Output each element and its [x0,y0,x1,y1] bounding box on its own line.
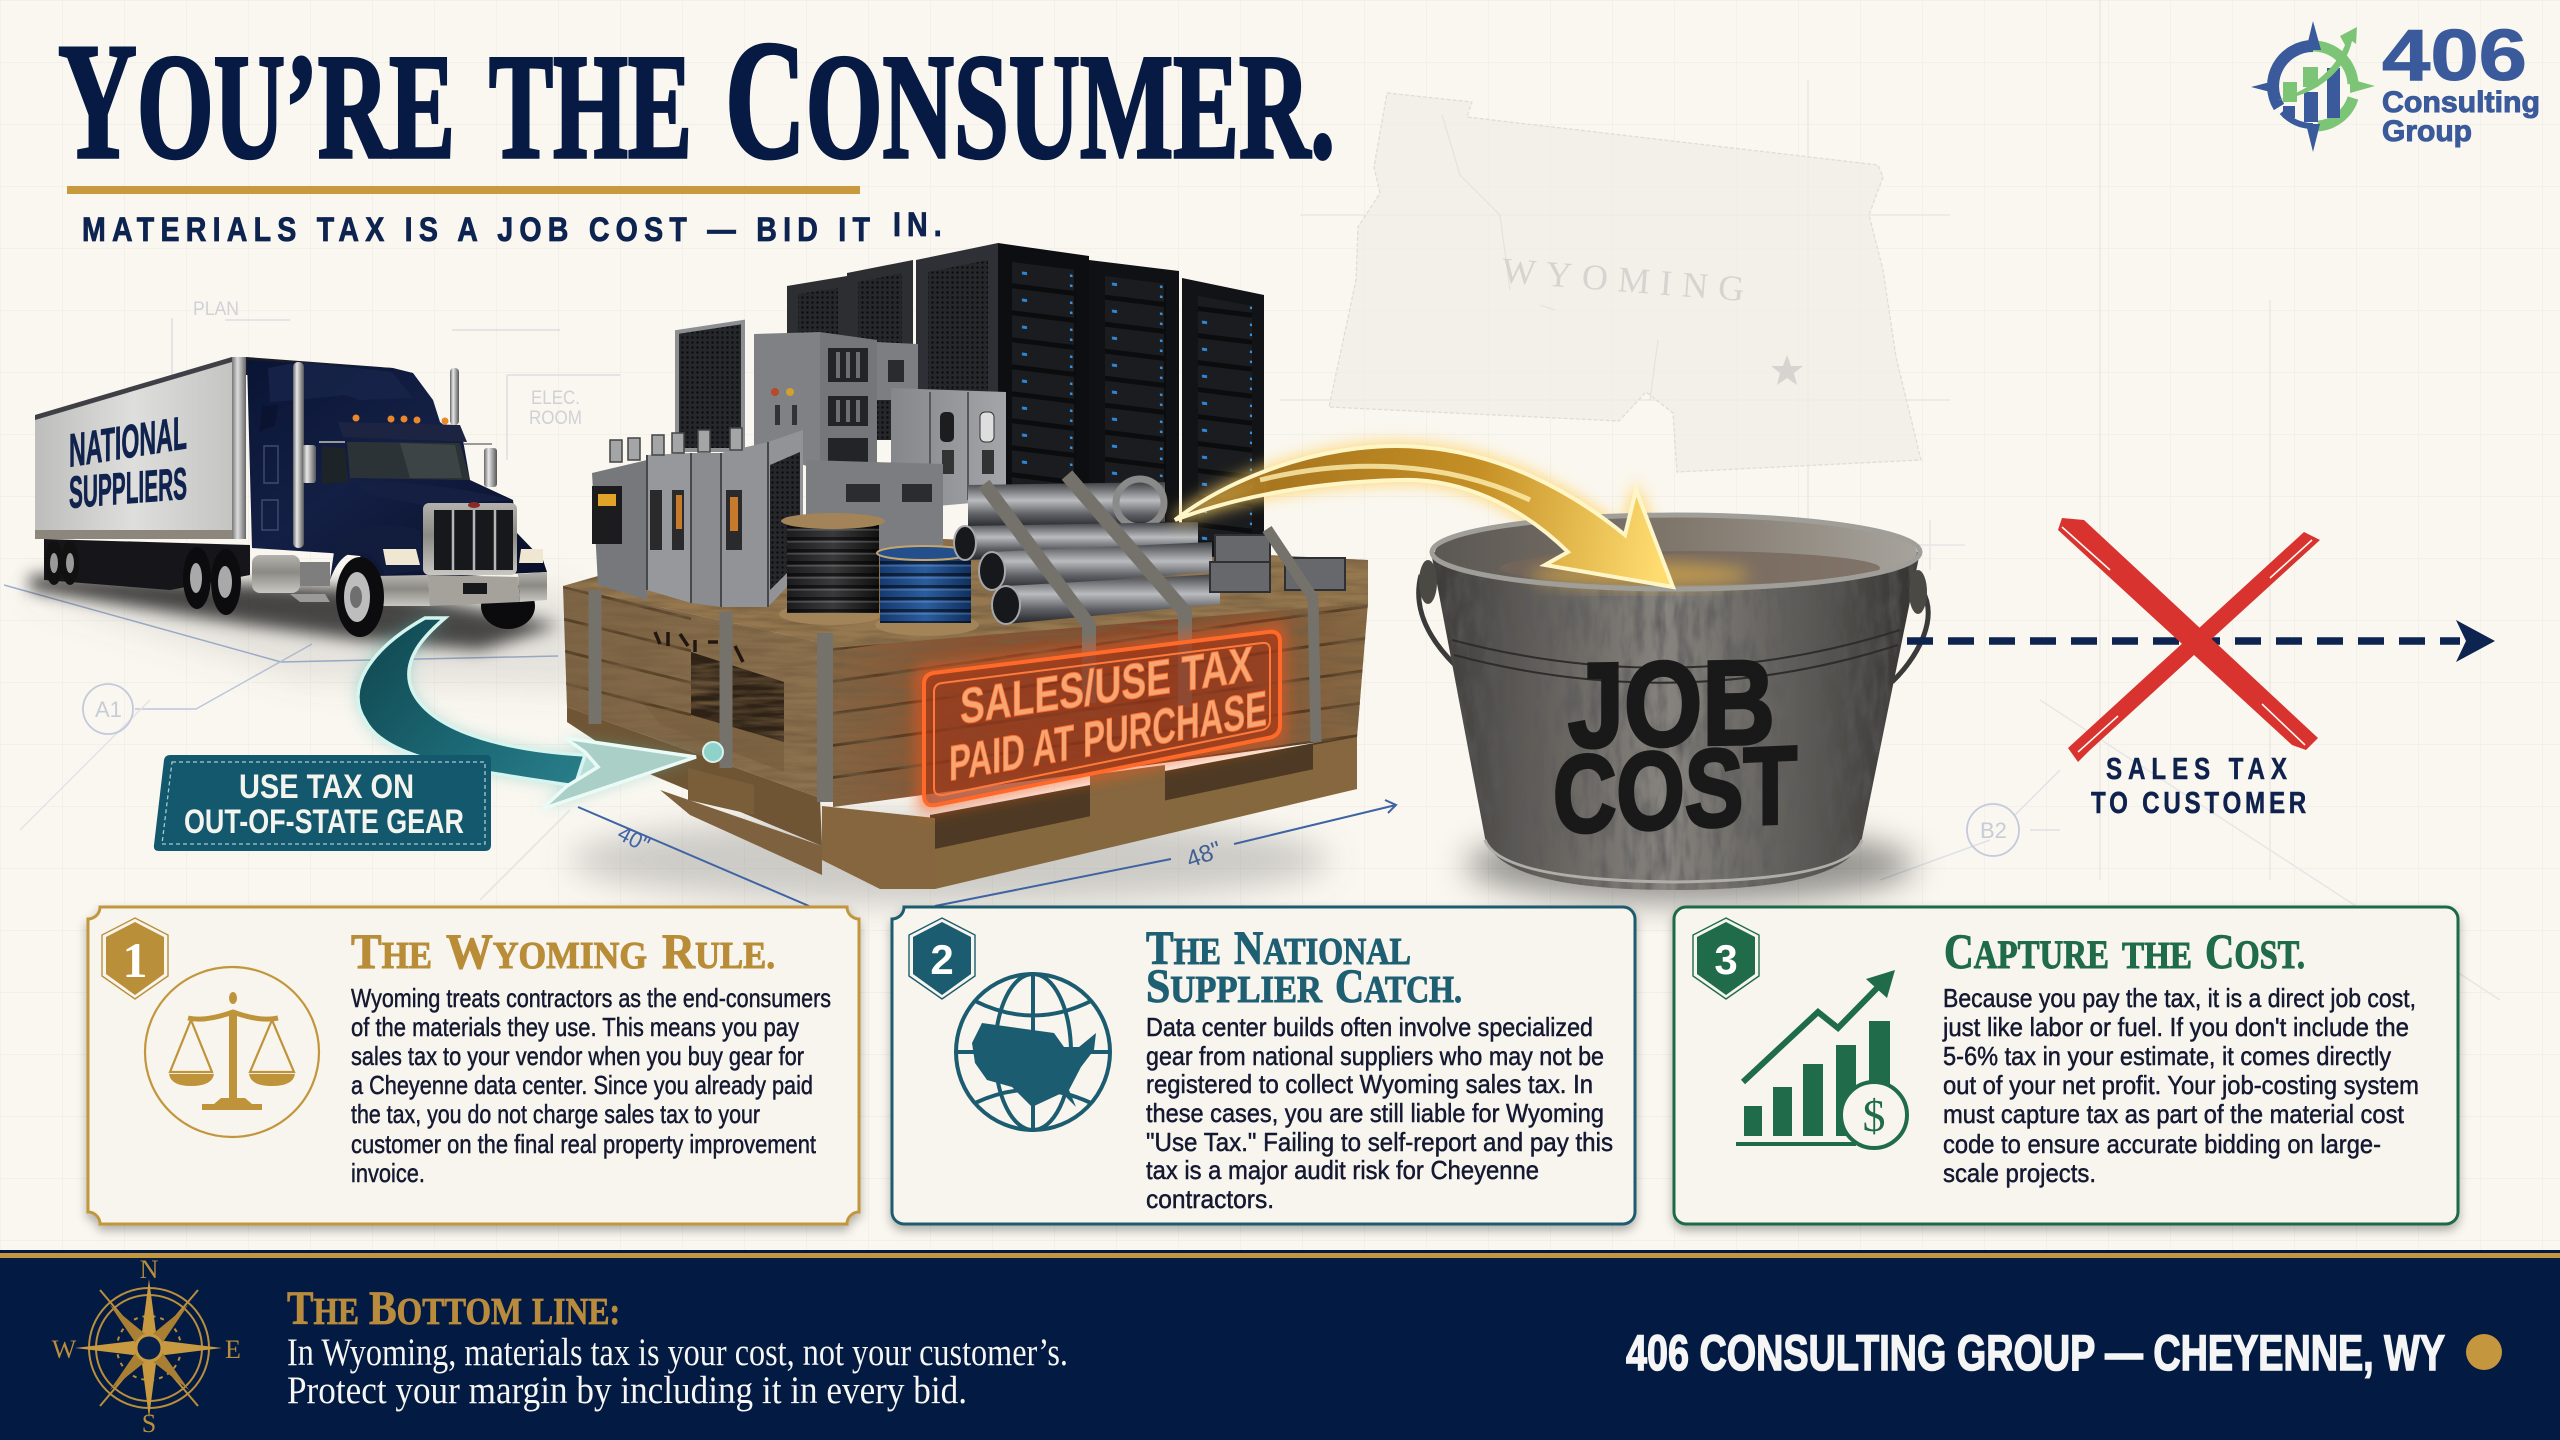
card 1 body text: the tax, you do not charge sales tax to your [351,1099,760,1129]
footer heading [287,1282,620,1335]
card 1 body text: sales tax to your vendor when you buy gear for [351,1041,804,1071]
card 1 heading: WYOMING [446,923,647,979]
server racks [787,243,1264,560]
center boxes [806,460,943,560]
card 3 body text: out of your net profit. Your job-costing system [1943,1070,2419,1100]
gold arrow body [1175,446,1673,587]
panel indicators [771,388,797,425]
icon: compass rose: N [140,1255,159,1284]
pallet corner block [822,806,935,889]
card 3 frame [1674,907,2458,1224]
sales tax to customer label [2091,751,2306,820]
truck: National Suppliers: SUPPLIERS [69,458,187,518]
dimension lines: 40" [614,820,654,858]
card 3 body text: just like labor or fuel. If you don't include the [1942,1012,2409,1042]
rack A [787,276,847,440]
pallet gap right [930,735,1357,855]
truck cab [247,360,547,580]
blue cable spool [875,546,979,636]
left face inner deck [640,700,784,772]
card 1 body text: Wyoming treats contractors as the end-consumers [351,983,831,1013]
footer background [0,1250,2560,1440]
card 1 frame [88,907,859,1224]
trailer text [69,407,187,518]
gold rule [67,186,860,194]
use tax badge [154,755,491,851]
card 1 badge [102,918,168,999]
dimension lines: 48" [1183,836,1225,874]
card 3 heading: COST. [2205,923,2305,979]
card 2 heading: SUPPLIER [1146,960,1322,1013]
center box windows [846,484,932,502]
stencil marks [655,632,743,662]
title: YOU’RE [58,9,455,193]
right box controls [940,412,994,474]
card 3 heading: CAPTURE [1944,923,2109,979]
card 1 heading: RULE. [662,923,775,979]
truck trailer [35,357,393,590]
blueprint label ELEC ROOM: ROOM [529,408,582,429]
icon: compass rose: S [142,1409,156,1438]
Wyoming map watermark [1329,93,1921,472]
gold arrow streak [1260,466,1530,500]
sales tax to customer label: TO CUSTOMER [2091,785,2306,820]
card 2 heading: THE [1146,922,1221,975]
rack A mesh [798,288,838,410]
card 3 body text: 5-6% tax in your estimate, it comes directly [1943,1041,2391,1071]
left grain [563,586,847,798]
arrow end dot [703,742,723,762]
blueprint callout B2 [1967,804,2019,856]
large panel front [820,332,877,470]
unit 3 vent [770,452,800,590]
bucket ribs [1452,630,1900,683]
bucket text: COST [1553,723,1797,857]
card 3 badge [1693,918,1759,999]
truck fuel tank [252,555,330,602]
rack C side [916,243,998,490]
golden job-cost arrow back glow [1175,446,1673,587]
truck: National Suppliers [35,357,547,637]
bucket rim [1432,515,1920,589]
top row pipe [965,522,1198,560]
rack C mesh [928,260,988,440]
badge plate [154,755,491,851]
upper coil [1116,479,1164,527]
right box seam [930,392,968,505]
blueprint label ELEC ROOM [529,388,582,429]
left breaker [592,486,622,544]
unit labels [650,490,742,550]
truck: National Suppliers: NATIONAL [69,407,187,478]
dashed arrow to customer [1907,620,2495,662]
crate left face [563,586,847,798]
badge text: OUT-OF-STATE GEAR [184,803,464,841]
card 3 body text: must capture tax as part of the material cost [1943,1099,2405,1129]
card 2 body text: Data center builds often involve specialized [1146,1012,1593,1042]
card 2 body text: "Use Tax." Failing to self-report and pay this [1146,1127,1613,1157]
card 2 body text: registered to collect Wyoming sales tax. In [1146,1069,1593,1099]
bucket handle right [1892,590,1928,682]
rack E front [1182,278,1264,560]
side panel [877,342,918,400]
logo wordmark: 406 [2382,16,2527,96]
bucket text: JOB [1568,635,1775,773]
footer gold dot [2466,1334,2502,1370]
bucket shadow [1465,827,1915,903]
bucket base ring [1485,840,1862,882]
pallet lower plank right [930,760,1357,889]
footer heading: BOTTOM [369,1282,522,1335]
unit seams [647,442,768,607]
card 2 body text: gear from national suppliers who may not be [1146,1041,1604,1071]
card 3 body text: scale projects. [1943,1158,2096,1188]
arrow head [542,738,696,809]
rack B mesh [858,273,902,440]
golden job-cost arrow [1175,446,1673,587]
card 3 body text: Because you pay the tax, it is a direct job cost, [1943,983,2416,1013]
card 2 body text: these cases, you are still liable for Wyoming [1146,1098,1604,1128]
truck headlights [383,549,543,565]
card 2 heading [1146,922,1462,1013]
card 1 body text: invoice. [351,1158,425,1188]
card 3 body text [1942,983,2419,1188]
top lugs [610,428,742,462]
wood grain [833,603,1368,807]
bottom row pipe [1006,574,1220,624]
pallet center block [1090,765,1165,838]
right box [891,388,1006,510]
truck front wheel [336,557,384,637]
title: THE [489,24,692,190]
bottom row end [992,586,1020,624]
fittings boxes [1210,535,1345,592]
logo: 406 Consulting Group [2251,16,2540,152]
truck grille [423,502,517,575]
electrical gear [592,322,1006,607]
sign text: SALES/USE TAX [960,635,1253,735]
card 1 body text: customer on the final real property improvement [351,1129,817,1159]
bucket interior [1435,516,1917,588]
rack B [847,260,913,440]
side panel switch [888,360,904,382]
card 2 frame [892,907,1635,1224]
blueprint callout A1 [83,684,133,734]
rack E units [1198,296,1252,545]
crate front face [833,603,1368,807]
footer gold line [0,1253,2560,1258]
Wyoming map watermark: WYOMING [1500,250,1746,309]
top row end [954,526,976,560]
crate top grain [563,530,1368,648]
logo wordmark: Consulting [2382,86,2540,119]
bucket body [1431,552,1920,890]
footer band [0,1250,2560,1440]
left breaker unit [592,460,647,600]
mid row pipe [992,542,1212,590]
left face opening [691,652,784,755]
large panel left [754,332,820,470]
truck stacks and mirrors [293,362,497,548]
unit 3 [721,430,803,607]
sign inner line [934,643,1270,795]
sign glow [921,629,1280,807]
icon: compass rose: E [225,1335,241,1364]
card 1 heading: THE [351,923,432,979]
plank lines [833,603,1368,807]
card 3 heading: THE [2122,935,2192,977]
sign text: PAID AT PURCHASE [949,679,1267,792]
card 1 heading [351,923,775,979]
icon: rising chart with dollar coin: $ [1862,1090,1886,1141]
card 2 heading: NATIONAL [1234,922,1411,975]
pallet ground shadow [570,815,1330,905]
card 3 body text: code to ensure accurate bidding on large- [1943,1129,2381,1159]
card 3 badge: 3 [1714,936,1738,983]
card 1 body text: a Cheyenne data center. Since you already paid [351,1070,813,1100]
bucket handle left [1419,575,1455,665]
truck wheels [45,541,535,629]
icon: rising chart with dollar coin [1736,970,1907,1148]
pallet right block [1313,737,1357,797]
unit 2 [691,453,721,607]
card 2 body text: contractors. [1146,1184,1274,1214]
steel pipes [954,479,1345,624]
blueprint floor lines [4,318,2500,1000]
card 2 badge [909,918,975,999]
pallet lower plank left [660,790,822,875]
card 1 body text: of the materials they use. This means you pay [351,1012,799,1042]
title [58,6,1335,194]
bucket ears [1419,560,1927,614]
arrow glow [357,618,696,809]
logo wordmark: Group [2382,115,2472,148]
badge text [184,768,464,841]
subtitle: IN. [893,206,942,244]
unit orange labels [676,495,738,531]
breaker handles [838,352,858,422]
mesh cabinets [677,322,743,450]
teal use-tax arrow [357,618,723,809]
left plank lines [563,586,691,722]
icon: compass rose: W [52,1335,77,1364]
icon: scales of justice [145,967,319,1137]
metal bucket [1419,515,1928,903]
sign plate [924,632,1280,805]
title: CONSUMER. [725,6,1335,194]
footer message: Protect your margin by including it in every bid. [287,1369,967,1412]
crate straps [595,475,1316,802]
blueprint label PLAN: PLAN [193,299,239,320]
badge text: USE TAX ON [239,768,414,806]
footer heading: THE [287,1282,359,1335]
blueprint callout B2: B2 [1980,818,2007,843]
mid row end [979,552,1005,590]
arrow shaft [358,618,585,786]
glowing sales/use tax sign [921,629,1280,807]
card 1 badge: 1 [122,932,148,988]
blueprint label ELEC ROOM: ELEC. [531,388,580,409]
bucket texture [1431,552,1920,890]
card 1 body text [351,983,831,1188]
card 2 body text [1146,1012,1613,1214]
card 3: Capture the Cost [1674,907,2458,1224]
red X [2058,518,2320,762]
card 2: The National Supplier Catch [892,907,1635,1224]
unit 1 [647,453,691,603]
rack C units [1012,262,1076,505]
card 2 heading: CATCH. [1335,960,1462,1013]
truck ground shadow [20,575,590,690]
footer message [287,1331,1068,1412]
wooden crate and pallet [563,530,1368,889]
bucket text [1553,635,1797,857]
card 2 body text: tax is a major audit risk for Cheyenne [1146,1155,1539,1185]
black cable spool [779,513,885,625]
sign text [949,635,1267,792]
sales tax to customer label: SALES TAX [2106,751,2287,786]
pallet under-deck [567,707,822,846]
bucket liquid [1500,551,1880,585]
pallet side block [688,768,754,815]
truck bumper [375,572,547,606]
blueprint callout A1: A1 [95,697,122,722]
crate top [563,530,1368,648]
footer message: In Wyoming, materials tax is your cost, not your customer’s. [287,1331,1068,1374]
card 3 heading [1944,923,2305,979]
rack D units [1105,276,1166,525]
footer heading: LINE: [532,1291,620,1333]
logo compass mark [2251,21,2375,152]
subtitle: MATERIALS TAX IS A JOB COST — BID IT [82,211,870,249]
dimension lines [578,800,1396,906]
inner glow [1530,562,1750,588]
breakers [828,348,868,466]
rack D front [1089,260,1179,530]
card 2 badge: 2 [930,936,954,983]
upper pipes [968,482,1165,528]
icon: compass rose [52,1255,241,1438]
logo wordmark [2382,16,2540,148]
rack C front [998,243,1089,510]
badge stitch [162,762,485,844]
card 1: The Wyoming Rule [88,907,859,1224]
icon: globe with USA [956,974,1110,1130]
